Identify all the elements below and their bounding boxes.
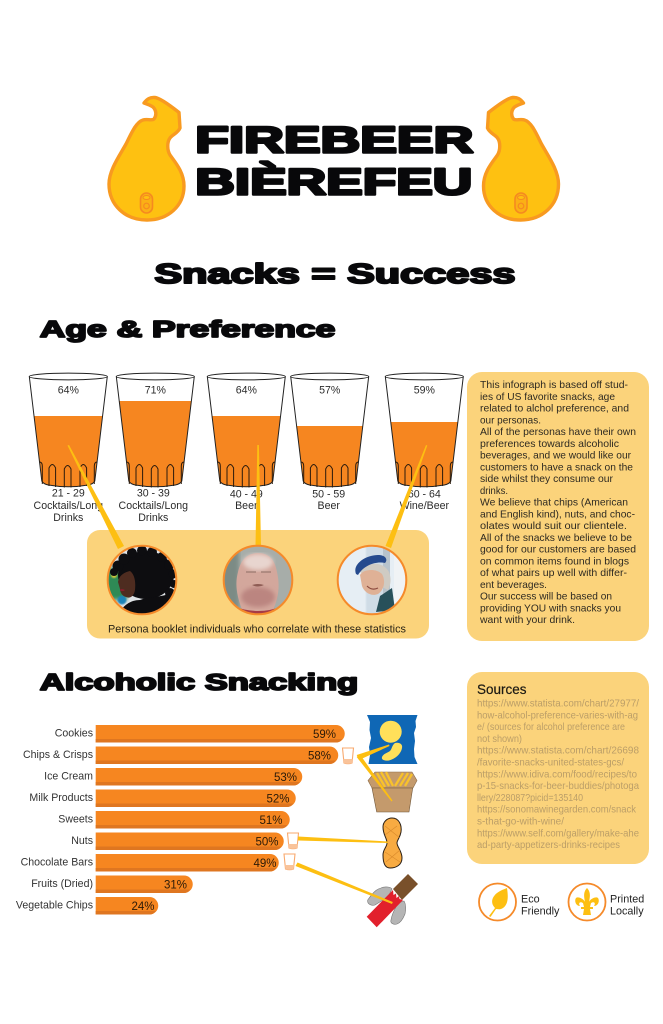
connector lines: glasses to personas <box>68 445 427 549</box>
glass 50-59: 50 - 59 <box>312 488 345 500</box>
glass 40-49 <box>207 373 285 512</box>
explanation paragraphs: side whilst they consume our <box>480 473 613 485</box>
glass 40-49: Beer <box>235 500 258 512</box>
bar: cookies <box>55 725 345 742</box>
glass 21-29: Drinks <box>53 512 83 524</box>
sources heading: Sources <box>477 682 527 697</box>
glass 30-39: 30 - 39 <box>137 488 170 500</box>
sources list: llery/228087?picid=135140 <box>477 793 583 804</box>
explanation paragraphs: preferences towards alcoholic <box>480 438 619 450</box>
bar: chocolate bars <box>21 854 279 872</box>
bar: vegetable chips: 24% <box>131 901 154 913</box>
bar: sweets <box>58 811 290 829</box>
explanation paragraphs: related to alchol preference, and <box>480 403 629 415</box>
bar: chocolate bars: Chocolate Bars <box>21 856 93 868</box>
explanation paragraphs: beverages, and we would like our <box>480 450 631 462</box>
heading: age and preference: Age & Preference <box>40 316 335 342</box>
explanation paragraphs: and English kind), nuts, and choc- <box>480 508 635 520</box>
explanation paragraphs: want with your drink. <box>479 614 575 626</box>
glass 40-49: 64% <box>236 384 257 396</box>
title: Snacks = Success <box>154 258 516 289</box>
glass 21-29: Cocktails/Long <box>34 500 103 512</box>
sources list: https://www.idiva.com/food/recipes/to <box>477 769 637 780</box>
panel: sources <box>467 672 649 864</box>
glass 60-64: 60 - 64 <box>408 488 441 500</box>
sources list: https://www.statista.com/chart/26698 <box>477 746 639 757</box>
badge: eco friendly: Eco <box>521 894 540 906</box>
glass 21-29 <box>29 373 107 524</box>
bar chart: alcoholic snacking <box>16 725 345 914</box>
sources list: how-alcohol-preference-varies-with-ag <box>477 710 638 721</box>
bar: vegetable chips: Vegetable Chips <box>16 900 93 912</box>
badge: printed locally: Locally <box>610 906 644 918</box>
sources list: s-that-go-with-wine/ <box>477 816 564 828</box>
bar: vegetable chips <box>16 897 158 914</box>
badge: eco friendly: Friendly <box>521 906 560 918</box>
explanation paragraphs <box>479 379 636 626</box>
glass 30-39: Drinks <box>138 512 168 524</box>
glass 21-29: 21 - 29 <box>52 488 85 500</box>
icon: peanut <box>383 818 402 868</box>
glass 30-39: 71% <box>145 384 166 396</box>
bar: cookies: Cookies <box>55 728 93 740</box>
bar: ice cream: Ice Cream <box>44 770 93 782</box>
bar: nuts <box>71 832 284 850</box>
logo wordmark: BIÈREFEU <box>195 162 472 203</box>
glass chart: age and drink preference <box>29 373 463 524</box>
glass 30-39: Cocktails/Long <box>119 500 188 512</box>
panel: explanation text <box>467 372 649 641</box>
glass 50-59 <box>291 373 369 512</box>
bar: nuts: 50% <box>255 836 278 848</box>
glass 50-59: 57% <box>319 384 341 396</box>
persona photo: woman in blue beret <box>335 544 409 616</box>
glass 60-64 <box>385 373 463 512</box>
explanation paragraphs: We believe that chips (American <box>480 497 628 509</box>
explanation paragraphs: This infograph is based off stud- <box>480 379 628 391</box>
bar: nuts: Nuts <box>71 835 93 847</box>
heading: alcoholic snacking: Alcoholic Snacking <box>40 669 358 695</box>
explanation paragraphs: our personas. <box>480 414 541 426</box>
explanation paragraphs: on common items found in blogs <box>480 555 629 567</box>
glass 30-39 <box>116 373 194 524</box>
bar: sweets: Sweets <box>58 814 93 826</box>
explanation paragraphs: good for our customers are based <box>480 544 636 556</box>
logo: left flame mascot <box>109 97 184 220</box>
bar: chocolate bars: 49% <box>253 858 276 870</box>
icon: chocolate bar <box>367 874 418 927</box>
bar: dried fruits <box>31 876 193 893</box>
icon: small cup chocolate <box>284 854 295 870</box>
sources list: https://www.statista.com/chart/27977/ <box>477 698 639 710</box>
icon: small cup nuts <box>288 833 298 849</box>
bar: milk products <box>29 790 296 807</box>
glass 60-64: Wine/Beer <box>400 500 449 512</box>
logo: right flame mascot <box>484 97 558 220</box>
badge: printed locally: Printed <box>610 894 644 906</box>
explanation paragraphs: ent beverages. <box>480 579 547 591</box>
explanation paragraphs: providing YOU with snacks you <box>480 602 621 614</box>
bar: chips and crisps: Chips & Crisps <box>23 749 93 761</box>
bar: chips and crisps: 58% <box>308 750 331 762</box>
sources list: /favorite-snacks-united-states-gcs/ <box>477 758 624 768</box>
glass 40-49: 40 - 49 <box>230 488 263 500</box>
badge: printed locally <box>568 884 644 920</box>
bar: dried fruits: 31% <box>164 880 187 892</box>
persona photo: woman with curly hair <box>105 544 179 616</box>
sources list: e/ (sources for alcohol preference are <box>477 722 625 733</box>
bar: dried fruits: Fruits (Dried) <box>31 878 93 890</box>
persona caption: Persona booklet individuals who correlate with these statistics <box>108 624 406 636</box>
sources list: https://www.self.com/gallery/make-ahe <box>477 828 639 839</box>
glass 50-59: Beer <box>318 500 340 512</box>
bar: cookies: 59% <box>313 729 336 741</box>
bar: milk products: Milk Products <box>29 792 93 804</box>
sources list <box>477 698 639 851</box>
sources list: https://sonomawinegarden.com/snack <box>477 805 637 816</box>
panel: persona booklet <box>87 530 429 638</box>
explanation paragraphs: All of the personas have their own <box>480 426 636 438</box>
bar: chips and crisps <box>23 746 338 764</box>
bar: milk products: 52% <box>266 794 290 806</box>
bar: ice cream: 53% <box>274 772 297 784</box>
glass 60-64: 59% <box>414 384 435 396</box>
logo wordmark: FIREBEER <box>195 120 473 161</box>
sources list: p-15-snacks-for-beer-buddies/photoga <box>477 781 639 792</box>
explanation paragraphs: Our success will be based on <box>480 591 612 603</box>
icon: crisp bag <box>367 715 418 764</box>
badge: eco friendly <box>479 884 560 920</box>
icon: box of fries <box>368 772 417 812</box>
sources list: ad-party-appetizers-drinks-recipes <box>477 840 620 851</box>
bar: ice cream <box>44 768 302 786</box>
explanation paragraphs: All of the snacks we believe to be <box>480 532 632 544</box>
explanation paragraphs: drinks. <box>480 485 508 497</box>
glass 21-29: 64% <box>58 384 79 396</box>
logo wordmark <box>195 120 473 203</box>
bar: sweets: 51% <box>259 815 282 827</box>
explanation paragraphs: ies of US favorite snacks, age <box>480 391 615 403</box>
sources list: not shown) <box>477 734 522 745</box>
explanation paragraphs: olates would suit our clientele. <box>480 520 627 532</box>
explanation paragraphs: of what pairs up well with differ- <box>480 567 627 579</box>
connector lines: snacks to cups <box>296 744 393 904</box>
explanation paragraphs: customers to have a snack on the <box>480 461 633 473</box>
icon: small cup chips <box>342 748 354 764</box>
persona photo: older man <box>221 544 295 618</box>
